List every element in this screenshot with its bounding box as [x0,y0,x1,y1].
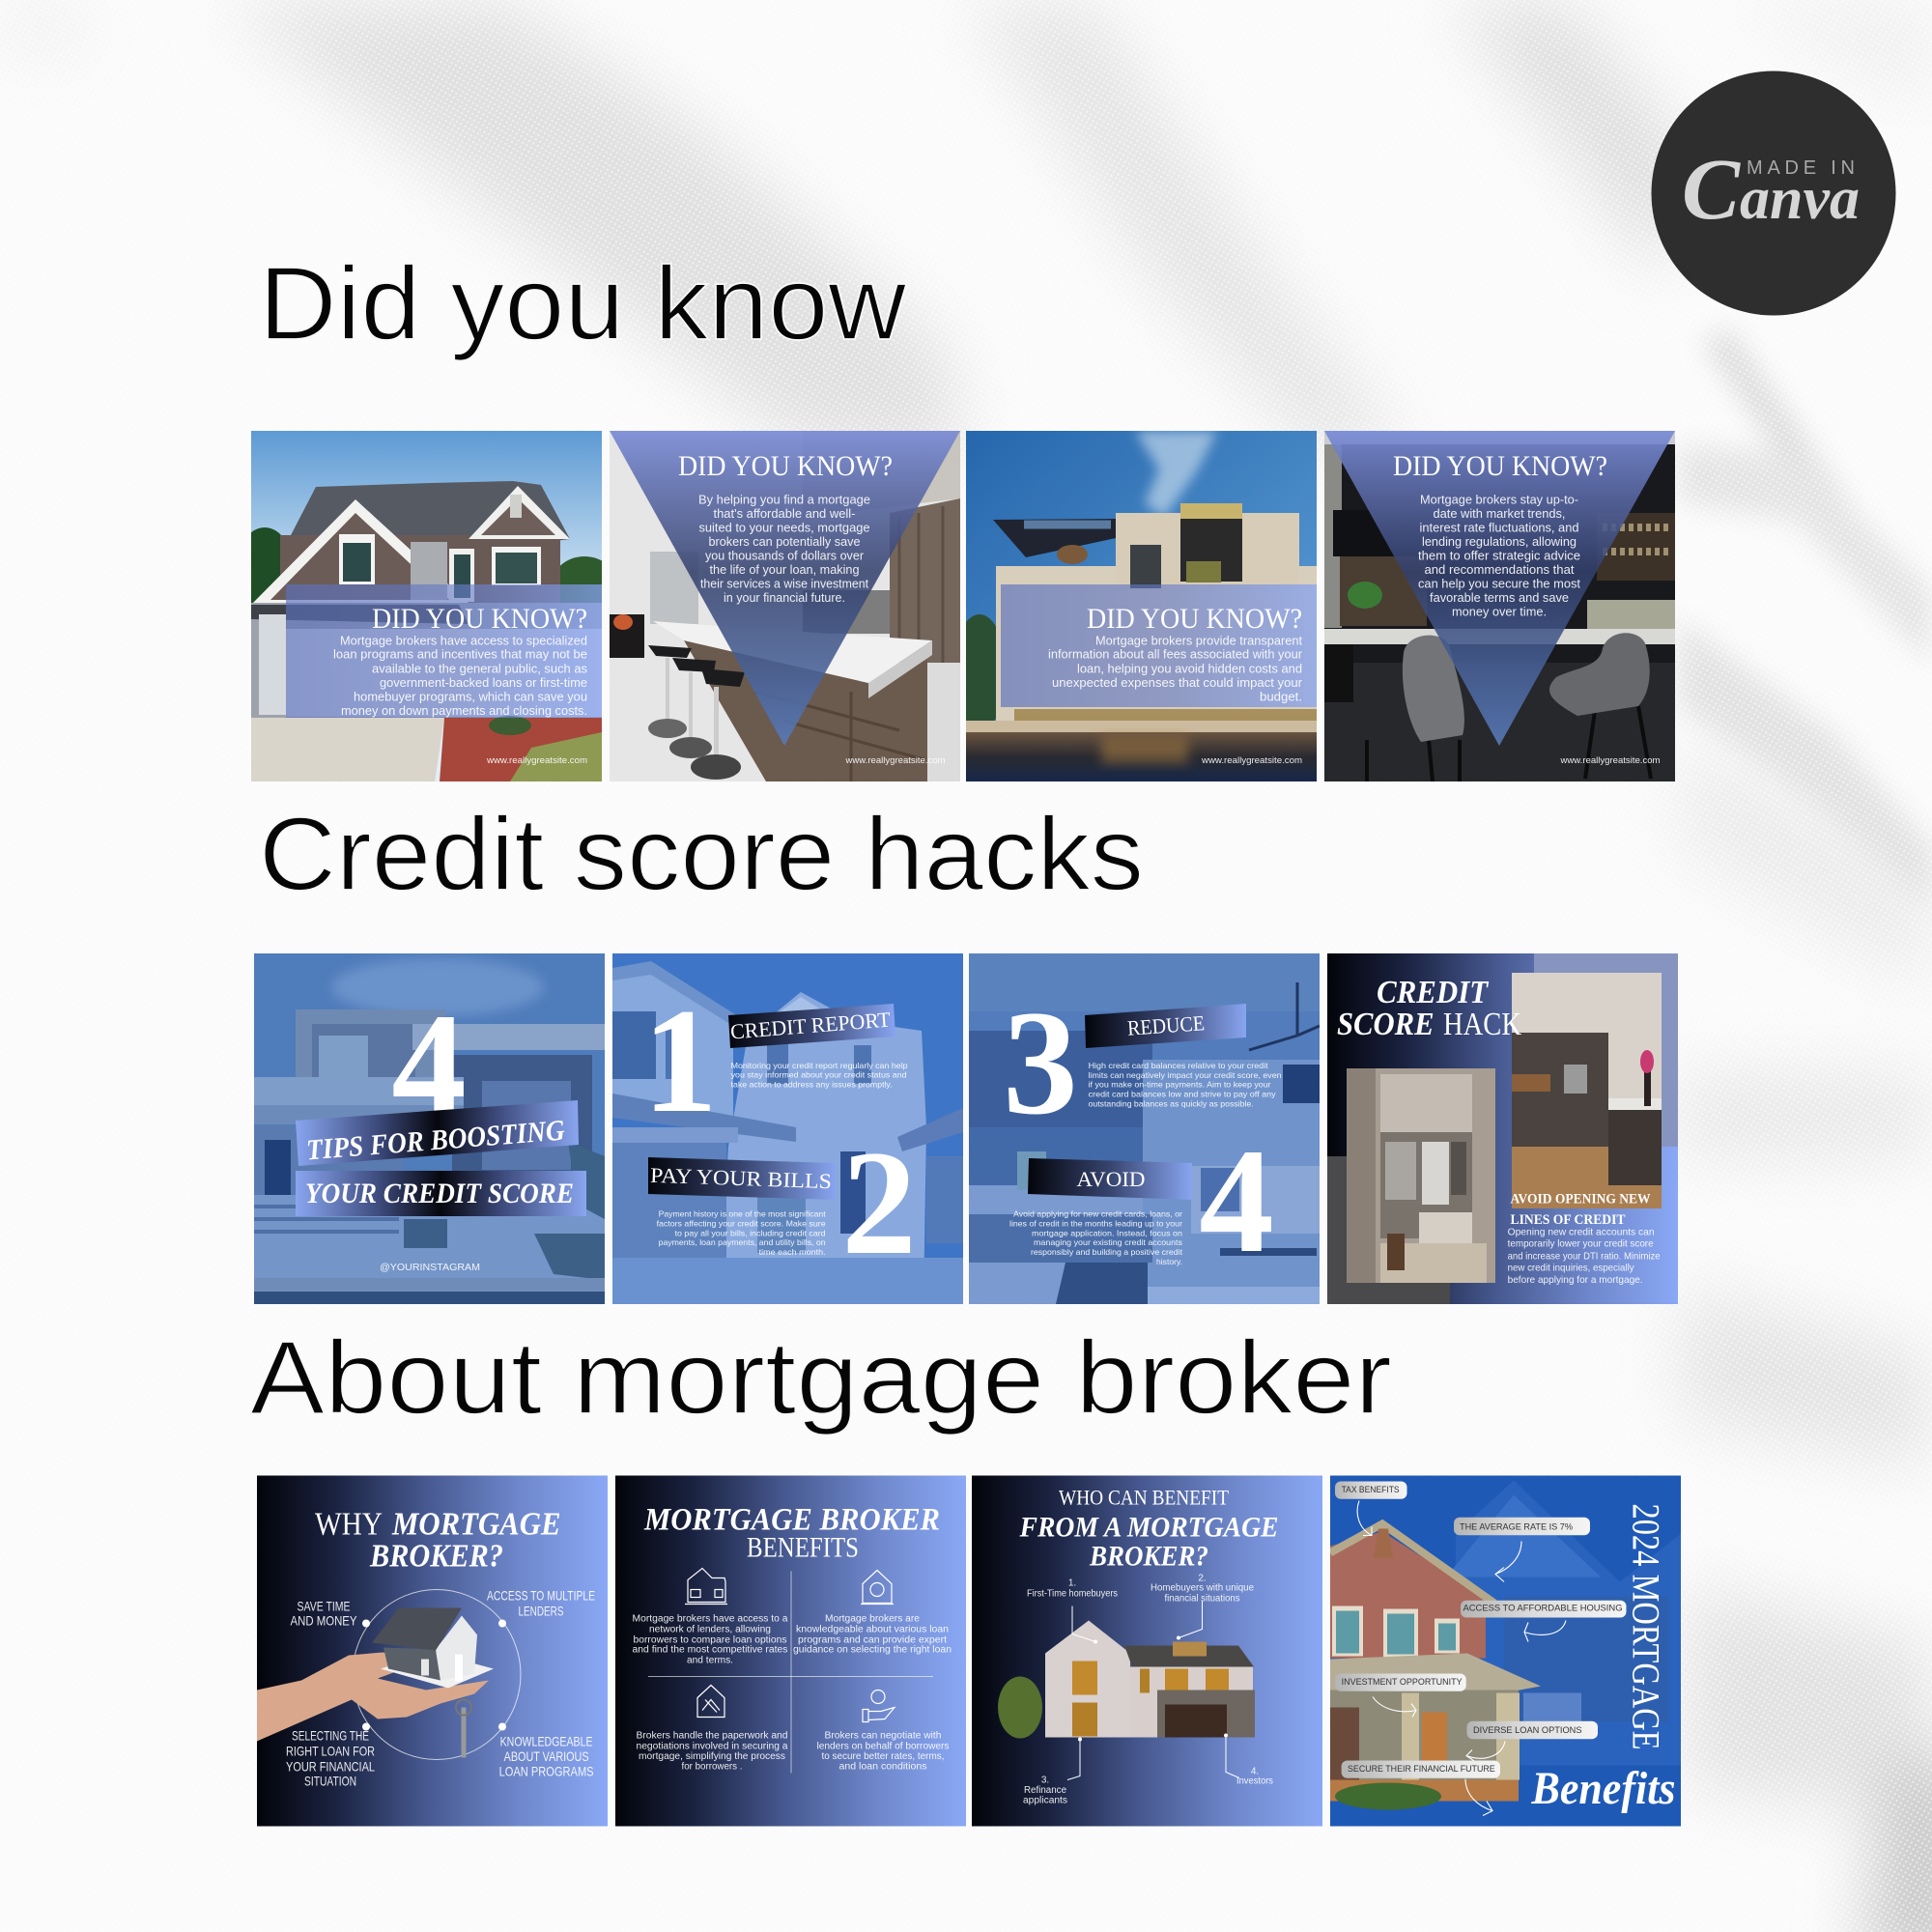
photo: modern kitchen [610,431,960,781]
photo: fitted kitchen [1512,973,1662,1208]
banner: reduce: REDUCE [1126,1010,1206,1040]
heading: who can benefit from a mortgage broker: WHO CAN BENEFIT [1059,1486,1229,1509]
badge: Made in Canva [1652,71,1895,315]
callout 4: investors: 4. [1251,1766,1259,1777]
pill: average rate [1454,1518,1590,1535]
callout 1: first-time homebuyers: First-Time homebuyers [1027,1588,1118,1600]
heading: who can benefit from a mortgage broker: BROKER? [1089,1540,1208,1573]
panel: credit score card 1 [254,953,605,1304]
text block: access to specialized loans: Mortgage brokers have access to specialized [340,634,587,647]
gradient backdrop [1327,953,1678,1304]
numeral 4: 4 [1199,1118,1274,1284]
text block: network of lenders: and find the most competitive rates [632,1644,788,1656]
text block: credit report: you stay informed about your credit status and [731,1070,907,1080]
heading: why mortgage broker: MORTGAGE [391,1507,560,1542]
website: www.reallygreatsite.com [1559,755,1660,765]
text block: paperwork [636,1731,788,1772]
text block: paperwork: negotiations involved in securing a [636,1741,788,1752]
banner: avoid: AVOID [1076,1167,1146,1191]
text block: transparent fees: Mortgage brokers provide transparent [1095,634,1303,647]
text block: pay your bills: payments, loan payments, and utility bills, on [659,1237,826,1247]
pill: secure financial future [1342,1760,1500,1778]
label: save time and money [290,1598,357,1629]
text block: potential savings: the life of your loan, making [709,563,860,577]
text block: transparent fees [1048,634,1303,704]
badge: Made in Canva: MADE IN [1747,157,1855,179]
overlay: translucent blue panel [1001,584,1317,707]
text block: paperwork: mortgage, simplifying the process [639,1751,785,1762]
numeral 3: 3 [1003,980,1078,1146]
text block: market trends: Mortgage brokers stay up-to- [1420,494,1578,507]
photo: blue-tinted interior [969,953,1320,1304]
text block: access to specialized loans: available to the general public, such as [372,662,587,675]
gradient backdrop [972,1476,1322,1826]
heading: who can benefit from a mortgage broker: FROM A MORTGAGE [1019,1511,1279,1544]
label: save time and money: AND MONEY [290,1613,357,1629]
vertical heading: 2024 mortgage: 2024 MORTGAGE [1625,1503,1668,1749]
heading: did you know: DID YOU KNOW? [372,603,587,635]
gradient backdrop [615,1476,966,1826]
text block: network of lenders: and terms. [687,1656,733,1665]
overlay: translucent blue panel [286,584,602,718]
text block: reduce: outstanding balances as quickly as possible. [1089,1099,1254,1109]
callout 1: first-time homebuyers [1027,1578,1118,1644]
callout 2: unique financial situations: 2. [1198,1573,1207,1584]
text block: expert guidance: programs and can provide expert [798,1634,947,1646]
panel: did you know card 2 [610,431,960,781]
callout 3: refinance applicants: 3. [1041,1776,1049,1785]
subheading: avoid opening new lines of credit: LINES OF CREDIT [1511,1212,1625,1228]
callout 2: unique financial situations: Homebuyers with unique [1151,1582,1254,1594]
text block: pay your bills: Payment history is one of the most significant [659,1208,826,1218]
text block: potential savings: that's affordable and well- [713,507,856,521]
pill: average rate: THE AVERAGE RATE IS 7% [1460,1522,1573,1532]
photo: suburban house [236,431,617,781]
overlay: inverted triangle [1324,431,1675,746]
text block: avoid [1009,1208,1183,1266]
pill: investment opportunity [1335,1673,1466,1691]
banner: your credit score: YOUR CREDIT SCORE [305,1178,574,1209]
callout 2: unique financial situations [1151,1573,1254,1640]
text block: market trends: money over time. [1452,605,1547,618]
text block: potential savings: you thousands of dollars over [705,550,864,563]
heading: credit score hack: CREDIT [1377,975,1489,1010]
callout 3: refinance applicants: Refinance [1024,1785,1066,1796]
callout 4: investors [1224,1733,1273,1787]
text block: access to specialized loans: money on down payments and closing costs. [341,704,587,718]
text block: reduce: High credit card balances relative to your credit [1089,1061,1268,1070]
text block: reduce: credit card balances low and strive to pay off any [1089,1090,1276,1099]
heading: credit score hack: SCORE [1337,1007,1435,1042]
panel: who can benefit [972,1476,1322,1826]
subheading: avoid opening new lines of credit: AVOID OPENING NEW [1511,1192,1650,1208]
heading: did you know: DID YOU KNOW? [1393,450,1607,482]
pill: secure financial future: SECURE THEIR FINANCIAL FUTURE [1348,1764,1495,1774]
heading: why mortgage broker: WHY [315,1507,383,1542]
illustration: hand holding a model house with keys [257,1607,494,1758]
photo: modern villa at dusk [952,431,1317,781]
text block: transparent fees: unexpected expenses that could impact your [1052,676,1302,690]
text block: avoid: mortgage application. Instead, focus on [1032,1228,1182,1237]
icon: house with dollar [861,1571,894,1604]
numeral 1: 1 [642,978,718,1144]
text block: network of lenders: Mortgage brokers have access to a [632,1613,788,1625]
text block: market trends: lending regulations, allowing [1422,535,1577,549]
illustration: lit family house [998,1621,1255,1739]
text block: expert guidance [793,1613,952,1656]
text block: network of lenders [632,1613,788,1665]
text block: transparent fees: loan, helping you avoid hidden costs and [1077,662,1302,675]
banner: credit report: CREDIT REPORT [729,1007,892,1043]
website: www.reallygreatsite.com [1201,755,1302,765]
banner: pay your bills: PAY YOUR BILLS [650,1163,832,1193]
text block: access to specialized loans: government-backed loans or first-time [380,676,587,690]
website: www.reallygreatsite.com [844,755,945,765]
arrows [1357,1501,1566,1816]
text block: avoid: managing your existing credit accounts [1034,1237,1182,1247]
text block: expert guidance: Mortgage brokers are [825,1613,921,1625]
heading: mortgage broker benefits: MORTGAGE BROKER [643,1503,940,1538]
heading: why mortgage broker: BROKER? [369,1538,503,1575]
panel: why mortgage broker [257,1476,608,1826]
text block: potential savings: By helping you find a mortgage [698,494,870,507]
text block: avoid: history. [1156,1257,1182,1266]
label: selecting the right loan [286,1727,375,1789]
badge: Made in Canva: Canva [1682,142,1860,238]
label: access to multiple lenders [487,1588,595,1619]
text block: access to specialized loans: loan programs and incentives that may not be [333,648,587,662]
text block: potential savings: in your financial future. [724,591,845,605]
banner: reduce [1085,1004,1246,1048]
pill: affordable housing: ACCESS TO AFFORDABLE HOUSING [1463,1604,1623,1613]
panel: credit score card 2 [612,953,963,1304]
banner: avoid [1028,1158,1192,1200]
panel: 2024 mortgage benefits [1330,1476,1681,1826]
pill: affordable housing [1461,1601,1627,1617]
photo: craftsman house over blue house [1330,1476,1681,1826]
text block: potential savings: brokers can potentially save [709,535,861,549]
text block: pay your bills [657,1208,826,1257]
text block: network of lenders: borrowers to compare loan options [634,1634,787,1646]
banner: tips for boosting: TIPS FOR BOOSTING [305,1115,566,1166]
label: selecting the right loan: SELECTING THE [292,1727,369,1743]
pill: diverse loan options: DIVERSE LOAN OPTIONS [1473,1725,1582,1735]
callout 2: unique financial situations: financial situations [1165,1594,1240,1604]
text block: pay your bills: factors affecting your credit score. Make sure [657,1218,826,1228]
text block: opening new credit: temporarily lower your credit score [1508,1238,1654,1250]
text block: paperwork: for borrowers . [682,1762,742,1772]
instagram handle: @YOURINSTAGRAM [380,1263,480,1273]
text block: transparent fees: information about all fees associated with your [1048,648,1302,662]
heading: mortgage broker benefits: BENEFITS [747,1532,859,1563]
subheading: avoid opening new lines of credit [1511,1192,1650,1228]
text block: pay your bills: time each month. [759,1247,826,1257]
divider cross [648,1571,933,1774]
text block: market trends: interest rate fluctuations, and [1420,522,1579,535]
pill: diverse loan options [1466,1721,1598,1739]
text block: pay your bills: to pay all your bills, including credit card [675,1228,826,1237]
text block: market trends: date with market trends, [1434,507,1565,521]
text block: credit report: take action to address any issues promptly. [731,1080,893,1090]
text block: potential savings: suited to your needs, mortgage [699,522,870,535]
text block: market trends [1418,494,1581,618]
banner: your credit score [296,1171,586,1216]
text block: reduce: limits can negatively impact your credit score, even [1089,1070,1282,1080]
text block: expert guidance: knowledgeable about various loan [796,1625,949,1634]
text block: negotiation: lenders on behalf of borrowers [817,1741,950,1752]
text block: expert guidance: guidance on selecting the right loan [793,1644,952,1656]
callout 1: first-time homebuyers: 1. [1068,1578,1076,1588]
diagram ring with dots [353,1590,521,1760]
text block: credit report: Monitoring your credit report regularly can help [731,1061,908,1070]
heading: who can benefit from a mortgage broker [1019,1486,1279,1573]
panel: did you know card 1 [251,431,602,781]
panel: credit score card 3 [969,953,1320,1304]
text block: avoid: responsibly and building a positive credit [1031,1247,1183,1257]
numeral 4: 4 [391,982,467,1149]
text block: opening new credit: before applying for a mortgage. [1508,1274,1643,1286]
heading: Credit score hacks: Credit score hacks [259,795,1144,912]
panel: did you know card 3 [966,431,1317,781]
pill: tax benefits: TAX BENEFITS [1342,1485,1400,1494]
icon: house [685,1569,727,1604]
text block: negotiation [817,1731,950,1772]
text block: opening new credit: new credit inquiries, especially [1508,1263,1634,1274]
icon: handshake house [697,1685,724,1718]
panel: did you know card 4 [1324,431,1675,781]
text block: credit report [731,1061,908,1090]
text block: avoid: lines of credit in the months leading up to your [1009,1218,1182,1228]
photo: blue-tinted villa [612,953,963,1304]
text block: market trends: favorable terms and save [1430,591,1569,605]
callout 4: investors: Investors [1236,1776,1273,1787]
text block: paperwork: Brokers handle the paperwork and [636,1731,788,1741]
text block: negotiation: Brokers can negotiate with [825,1731,941,1741]
website: www.reallygreatsite.com [486,755,587,765]
numeral 2: 2 [841,1120,917,1286]
label: selecting the right loan: RIGHT LOAN FOR [286,1743,375,1758]
photo: blue-tinted modern house [254,953,605,1304]
label: knowledgeable about loan programs [499,1733,594,1779]
heading: credit score hack: HACK [1443,1007,1521,1042]
text block: access to specialized loans [333,634,587,718]
heading: mortgage broker benefits [643,1503,940,1563]
text block: access to specialized loans: homebuyer programs, which can save you [354,691,587,704]
callout 3: refinance applicants [1023,1737,1082,1806]
heading: Did you know: Did you know [259,244,907,361]
label: save time and money: SAVE TIME [298,1598,350,1613]
overlay: inverted triangle [610,431,960,746]
heading: did you know: DID YOU KNOW? [1087,603,1302,635]
text block: reduce [1089,1061,1282,1109]
banner: pay your bills [648,1157,836,1200]
photo: dark dining kitchen [1324,431,1675,781]
panel: credit score card 4 [1327,953,1678,1304]
label: selecting the right loan: YOUR FINANCIAL [286,1758,375,1774]
callout 3: refinance applicants: applicants [1023,1795,1067,1806]
text block: opening new credit: Opening new credit accounts can [1508,1226,1655,1237]
text block: network of lenders: network of lenders, allowing [649,1625,771,1634]
pill: tax benefits [1335,1482,1406,1499]
text block: market trends: and recommendations that [1424,563,1575,577]
label: access to multiple lenders: LENDERS [518,1604,564,1619]
text block: negotiation: and loan conditions [838,1762,927,1772]
heading: did you know: DID YOU KNOW? [678,450,893,482]
text block: potential savings: their services a wise investment [700,578,869,591]
heading: About mortgage broker: About mortgage broker [250,1319,1392,1435]
heading: why mortgage broker [315,1507,560,1575]
heading: credit score hack [1337,975,1521,1042]
text block: potential savings [698,494,870,605]
text block: negotiation: to secure better rates, terms, [821,1751,945,1762]
text block: market trends: can help you secure the most [1418,578,1581,591]
panel: mortgage broker benefits [615,1476,966,1826]
text block: opening new credit: and increase your DTI ratio. Minimize [1508,1250,1661,1262]
icon: hand with coin [863,1690,895,1721]
text block: opening new credit [1508,1226,1661,1286]
pill: investment opportunity: INVESTMENT OPPORTUNITY [1342,1677,1463,1687]
text block: reduce: if you make on-time payments. Aim to keep your [1089,1080,1271,1090]
label: selecting the right loan: SITUATION [304,1774,356,1789]
gradient backdrop [257,1476,608,1826]
text block: transparent fees: budget. [1260,691,1302,704]
photo: walk-in closet [1347,1068,1495,1283]
text block: avoid: Avoid applying for new credit cards, loans, or [1013,1208,1182,1218]
text block: market trends: them to offer strategic advice [1418,550,1580,563]
